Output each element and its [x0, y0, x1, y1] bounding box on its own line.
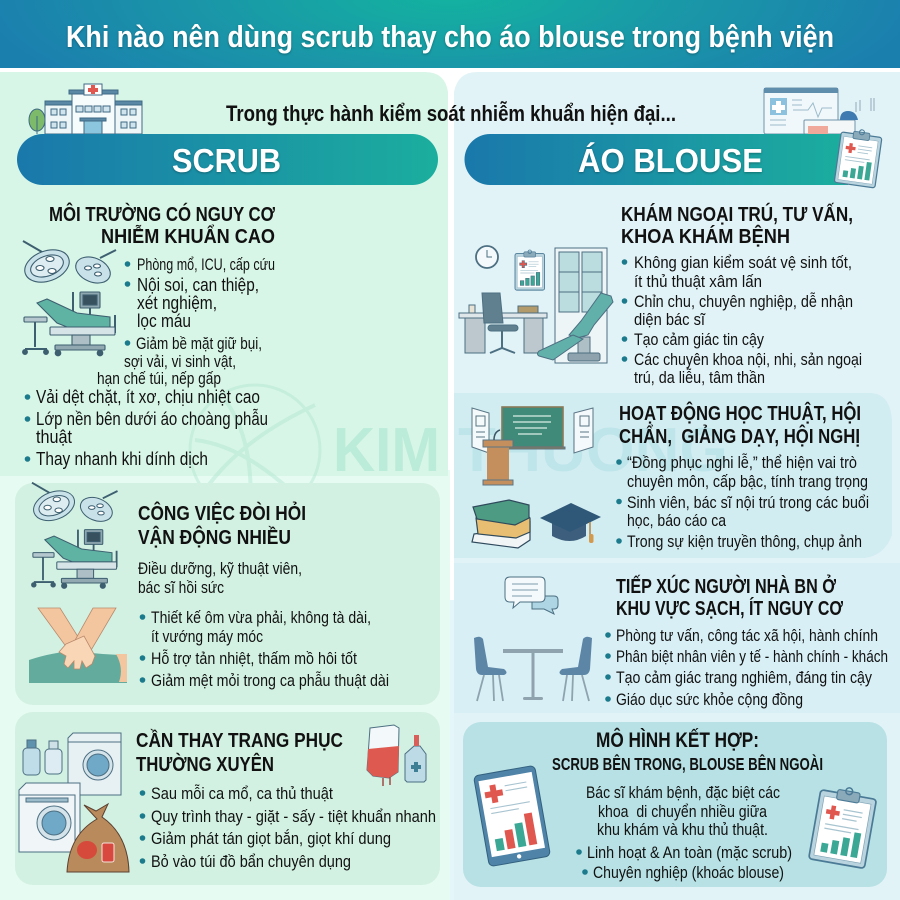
heading: KHÁM NGOẠI TRÚ, TƯ VẤN, [621, 202, 853, 226]
bullet list: Giảm mệt mỏi trong ca phẫu thuật dài [151, 671, 389, 690]
bullet list [605, 626, 888, 709]
icon: operating room [20, 241, 116, 356]
bullet list: Không gian kiểm soát vệ sinh tốt, [634, 253, 852, 272]
description [586, 784, 780, 839]
bullet list [576, 843, 792, 882]
bullet list: ít thủ thuật xâm lấn [634, 272, 762, 291]
description: Điều dưỡng, kỹ thuật viên, [138, 560, 302, 578]
heading [138, 501, 306, 549]
panel: combined model [463, 722, 887, 887]
bullet list: ít vướng máy móc [151, 628, 263, 646]
bullet list [25, 256, 275, 469]
watermark [190, 385, 728, 515]
heading: THƯỜNG XUYÊN [136, 752, 274, 776]
icon: laundry set [19, 733, 129, 872]
description: Bác sĩ khám bệnh, đặc biệt các [586, 784, 780, 802]
heading [552, 728, 823, 774]
bullet list: sợi vải, vi sinh vật, [124, 353, 236, 371]
bullet list: hạn chế túi, nếp gấp [97, 370, 221, 388]
bullet list [622, 253, 862, 387]
bullet list: Chỉn chu, chuyên nghiệp, dễ nhận [634, 292, 853, 311]
band: family contact block background [454, 563, 900, 713]
icon: table and chairs [474, 637, 592, 701]
bullet list: Phòng mổ, ICU, cấp cứu [137, 256, 275, 274]
band: academic block background [454, 393, 892, 558]
header banner [0, 0, 900, 68]
panel: blouse column background [454, 72, 900, 900]
bullet list: thuật [36, 427, 72, 447]
description: khu khám và khu thủ thuật. [597, 821, 768, 839]
heading: CÔNG VIỆC ĐÒI HỎI [138, 501, 306, 525]
icon: speech bubbles [505, 577, 558, 614]
description [138, 560, 302, 597]
bullet list: Giảm bề mặt giữ bụi, [136, 335, 262, 353]
heading [136, 729, 343, 776]
description: bác sĩ hồi sức [138, 579, 224, 597]
pill: ao blouse [464, 134, 848, 185]
heading: TIẾP XÚC NGƯỜI NHÀ BN Ở [616, 574, 836, 598]
icon: chest compression [29, 608, 127, 683]
bullet list: Quy trình thay - giặt - sấy - tiệt khuẩn nhanh [151, 808, 436, 826]
panel: high mobility work [15, 483, 440, 705]
pill: scrub [17, 134, 438, 185]
bullet list: Sau mỗi ca mổ, ca thủ thuật [151, 784, 333, 803]
icon: hospital [29, 84, 142, 134]
icon: blood bag and bottle [367, 725, 426, 786]
icon: tablet [473, 765, 551, 867]
description: khoa di chuyển nhiều giữa [598, 803, 768, 821]
bullet list: trú, da liễu, tâm thần [634, 368, 765, 387]
bullet list [140, 609, 389, 690]
bullet list: Thay nhanh khi dính dịch [36, 449, 208, 469]
panel: frequent changing [15, 712, 440, 885]
bullet list: Linh hoạt & An toàn (mặc scrub) [587, 843, 792, 862]
bullet list: Giáo dục sức khỏe cộng đồng [616, 690, 803, 709]
bullet list: Vải dệt chặt, ít xơ, chịu nhiệt cao [36, 387, 260, 407]
heading [619, 401, 861, 448]
heading [616, 574, 843, 620]
bullet list: Bỏ vào túi đồ bẩn chuyên dụng [151, 853, 351, 871]
icon: operating room [29, 483, 118, 588]
bullet list: xét nghiệm, [137, 293, 217, 313]
heading: KHOA KHÁM BỆNH [621, 224, 790, 248]
heading [49, 202, 275, 248]
bullet list: Các chuyên khoa nội, nhi, sản ngoại [634, 350, 862, 369]
icon: doctor office [459, 246, 613, 363]
heading: MÔI TRƯỜNG CÓ NGUY CƠ [49, 202, 275, 226]
bullet list: lọc máu [137, 311, 191, 331]
pill: scrub: SCRUB [172, 142, 281, 179]
icon: monitor windows [764, 88, 874, 134]
section: high infection risk [20, 202, 275, 469]
bullet list: Nội soi, can thiệp, [137, 275, 259, 295]
bullet list: học, báo cáo ca [627, 511, 726, 530]
bullet list: Hỗ trợ tản nhiệt, thấm mồ hôi tốt [151, 649, 357, 668]
icon: clipboard [809, 783, 878, 868]
heading: MÔ HÌNH KẾT HỢP: [596, 728, 759, 752]
heading [621, 202, 853, 248]
bullet list: Thiết kế ôm vừa phải, không tà dài, [151, 609, 371, 627]
icon: books [472, 500, 530, 548]
bullet list: Chuyên nghiệp (khoác blouse) [593, 863, 784, 882]
pill: ao blouse: ÁO BLOUSE [578, 142, 763, 179]
bullet list: Tạo cảm giác tin cậy [634, 330, 764, 349]
bullet list: Giảm phát tán giọt bắn, giọt khí dung [151, 829, 391, 848]
bullet list: Lớp nền bên dưới áo choàng phẫu [36, 408, 268, 429]
intro text: Trong thực hành kiểm soát nhiễm khuẩn hiện đại... [226, 101, 676, 126]
heading: CẦN THAY TRANG PHỤC [136, 729, 343, 752]
bullet list [140, 784, 436, 871]
section: family contact [474, 574, 888, 709]
icon: clipboard on pill [834, 127, 883, 188]
icon: graduation cap [540, 503, 601, 543]
watermark: KIM [333, 416, 440, 485]
bullet list [616, 453, 869, 551]
icon: lecture board and podium [472, 407, 593, 485]
bullet list: diện bác sĩ [634, 310, 706, 329]
section: academic activity [472, 401, 869, 551]
heading: KHU VỰC SẠCH, ÍT NGUY CƠ [616, 597, 843, 620]
panel: scrub column background [0, 72, 448, 476]
section: outpatient consultation [459, 202, 862, 387]
heading: NHIỄM KHUẨN CAO [101, 225, 275, 248]
heading: VẬN ĐỘNG NHIỀU [138, 525, 291, 549]
bullet list: “Đồng phục nghi lễ,” thể hiện vai trò [627, 453, 857, 472]
watermark: THUONG [458, 416, 728, 485]
